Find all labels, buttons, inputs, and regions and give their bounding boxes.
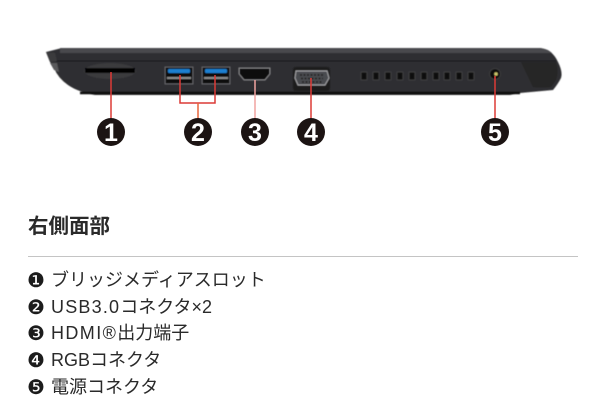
badge 5 — [481, 118, 509, 147]
USB 3.0 ports — [165, 67, 230, 84]
power connector — [490, 68, 500, 80]
list item 5: ❺ — [27, 375, 45, 399]
VGA port — [293, 67, 330, 91]
badge 1 — [97, 118, 125, 147]
list item 4 — [27, 348, 161, 372]
list item 3: HDMI®出力端子 — [51, 323, 189, 343]
list item 1: ブリッジメディアスロット — [51, 270, 266, 290]
list item 2: ❷ — [27, 295, 45, 319]
heading: 右側面部 — [28, 215, 110, 238]
list item 4: ❹ — [27, 348, 45, 372]
ventilation slots — [361, 72, 474, 80]
list item 1: ❶ — [27, 268, 45, 292]
badge 3 — [241, 118, 269, 147]
badge 4 — [297, 118, 325, 147]
list item 2: USB3.0コネクタ×2 — [51, 297, 212, 317]
bridge media slot — [84, 63, 136, 79]
badge 2: 2 — [191, 119, 205, 147]
laptop side view diagram — [45, 47, 562, 147]
badge 4: 4 — [304, 119, 318, 147]
badge 3: 3 — [248, 119, 262, 147]
list item 5 — [27, 375, 158, 399]
list item 5: 電源コネクタ — [51, 377, 158, 397]
leader lines — [111, 72, 495, 120]
badge 1: 1 — [104, 119, 118, 147]
laptop body — [46, 48, 562, 95]
badge 5: 5 — [488, 119, 502, 147]
list item 4: RGBコネクタ — [51, 350, 161, 370]
HDMI port — [239, 68, 270, 80]
list item 3: ❸ — [27, 321, 45, 345]
badge 2 — [184, 118, 212, 147]
